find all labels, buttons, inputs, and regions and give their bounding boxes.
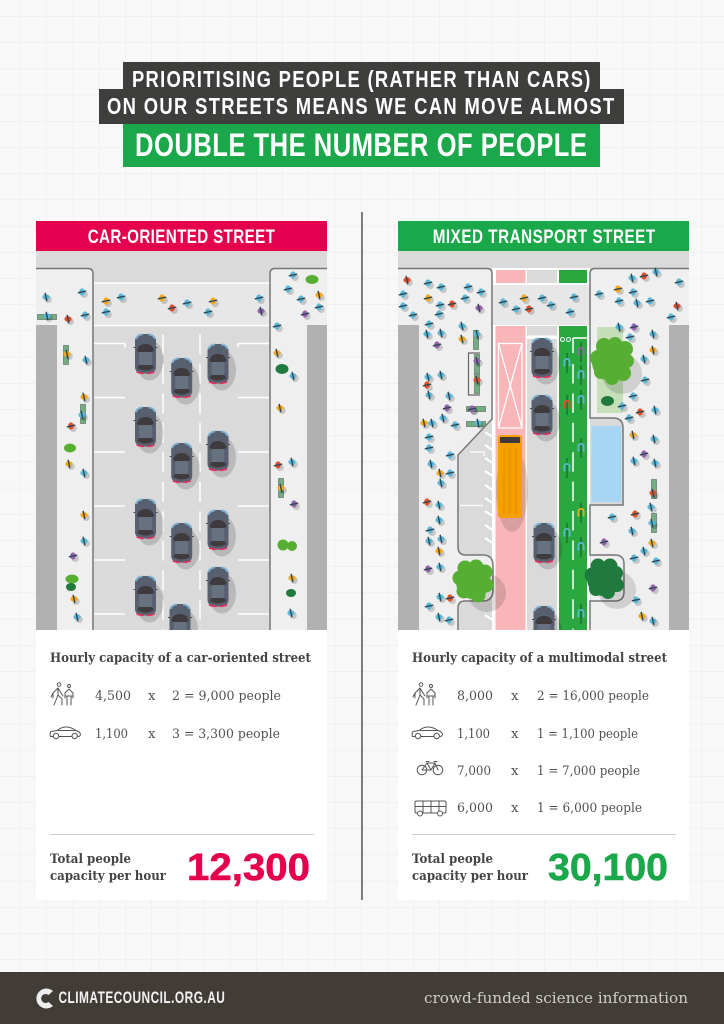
row: buses	[415, 801, 642, 816]
row: bikes: 1 = 7,000 people	[537, 764, 640, 779]
card heading: Hourly capacity of a car-oriented street	[50, 651, 311, 666]
row: cars	[412, 727, 638, 742]
row: pedestrians: x	[511, 689, 519, 704]
row: cars: 3 = 3,300 people	[172, 727, 280, 742]
icon: car	[412, 727, 442, 739]
kerb strips	[398, 325, 689, 630]
bus lane	[496, 326, 526, 630]
pedestrians	[399, 268, 685, 627]
capacity card: multimodal	[398, 630, 689, 900]
row: buses: 6,000	[457, 801, 493, 816]
row: pedestrians: 2 = 16,000 people	[537, 689, 649, 704]
capacity card: car-oriented	[36, 630, 327, 900]
water basin	[592, 426, 621, 502]
cars and bus	[496, 338, 562, 652]
cyclists	[564, 342, 584, 624]
total label	[412, 852, 528, 884]
street map: mixed transport	[398, 251, 689, 652]
row: cars: 1,100	[457, 727, 490, 742]
title: ON OUR STREETS MEANS WE CAN MOVE ALMOST	[107, 94, 614, 120]
benches	[466, 330, 656, 532]
icon: pedestrians	[413, 683, 435, 705]
row: cars: 1 = 1,100 people	[537, 727, 638, 742]
row: buses: 1 = 6,000 people	[537, 801, 642, 816]
title: DOUBLE THE NUMBER OF PEOPLE	[135, 128, 587, 164]
car lane	[527, 326, 557, 630]
row: bikes	[417, 762, 640, 779]
total label: Total people	[412, 852, 493, 867]
benches	[38, 314, 284, 498]
pedestrians	[42, 271, 325, 623]
row: bikes: 7,000	[457, 764, 491, 779]
icon: pedestrians	[51, 683, 73, 705]
icon: bus	[415, 801, 446, 816]
title: PRIORITISING PEOPLE (RATHER THAN CARS)	[132, 67, 590, 93]
icon: bicycle	[417, 762, 443, 775]
website: CLIMATECOUNCIL.ORG.AU	[58, 989, 225, 1008]
row: pedestrians: 8,000	[457, 689, 493, 704]
planter	[597, 327, 623, 413]
row: pedestrians: 4,500	[95, 689, 131, 704]
row: cars	[50, 727, 280, 742]
street map: car-oriented	[36, 251, 327, 650]
total number: 30,100	[548, 847, 668, 889]
title	[99, 62, 624, 167]
panel: car-oriented street	[36, 221, 327, 900]
row: pedestrians: 2 = 9,000 people	[172, 689, 281, 704]
footer	[0, 972, 724, 1024]
heading: car-oriented street: CAR-ORIENTED STREET	[88, 225, 275, 247]
row: cars: x	[511, 727, 519, 742]
heading: mixed transport street: MIXED TRANSPORT STREET	[433, 225, 656, 247]
icon: car	[50, 727, 80, 739]
total label: capacity per hour	[50, 869, 166, 884]
bushes	[64, 275, 318, 597]
row: cars: x	[148, 727, 156, 742]
heading: car-oriented street	[36, 221, 327, 251]
total label	[50, 852, 166, 884]
row: pedestrians	[51, 683, 281, 705]
row: cars: 1,100	[95, 727, 128, 742]
cars	[134, 334, 236, 650]
bike lane	[559, 326, 587, 630]
tagline: crowd-funded science information	[424, 989, 688, 1007]
total number: 12,300	[187, 847, 310, 889]
row: bikes: x	[511, 764, 519, 779]
row: pedestrians	[413, 683, 649, 705]
left footpath and parking bay	[398, 268, 493, 630]
row: pedestrians: x	[148, 689, 156, 704]
icon: climate council logo	[36, 988, 53, 1009]
trees	[452, 337, 642, 612]
card heading: Hourly capacity of a multimodal street	[412, 651, 667, 666]
row: buses: x	[511, 801, 519, 816]
heading: mixed transport street	[398, 221, 689, 251]
total label: capacity per hour	[412, 869, 528, 884]
total label: Total people	[50, 852, 131, 867]
centre divider	[361, 212, 363, 900]
right footpath and bays	[590, 268, 689, 630]
panel: mixed transport street	[398, 221, 689, 900]
bus	[496, 435, 528, 532]
